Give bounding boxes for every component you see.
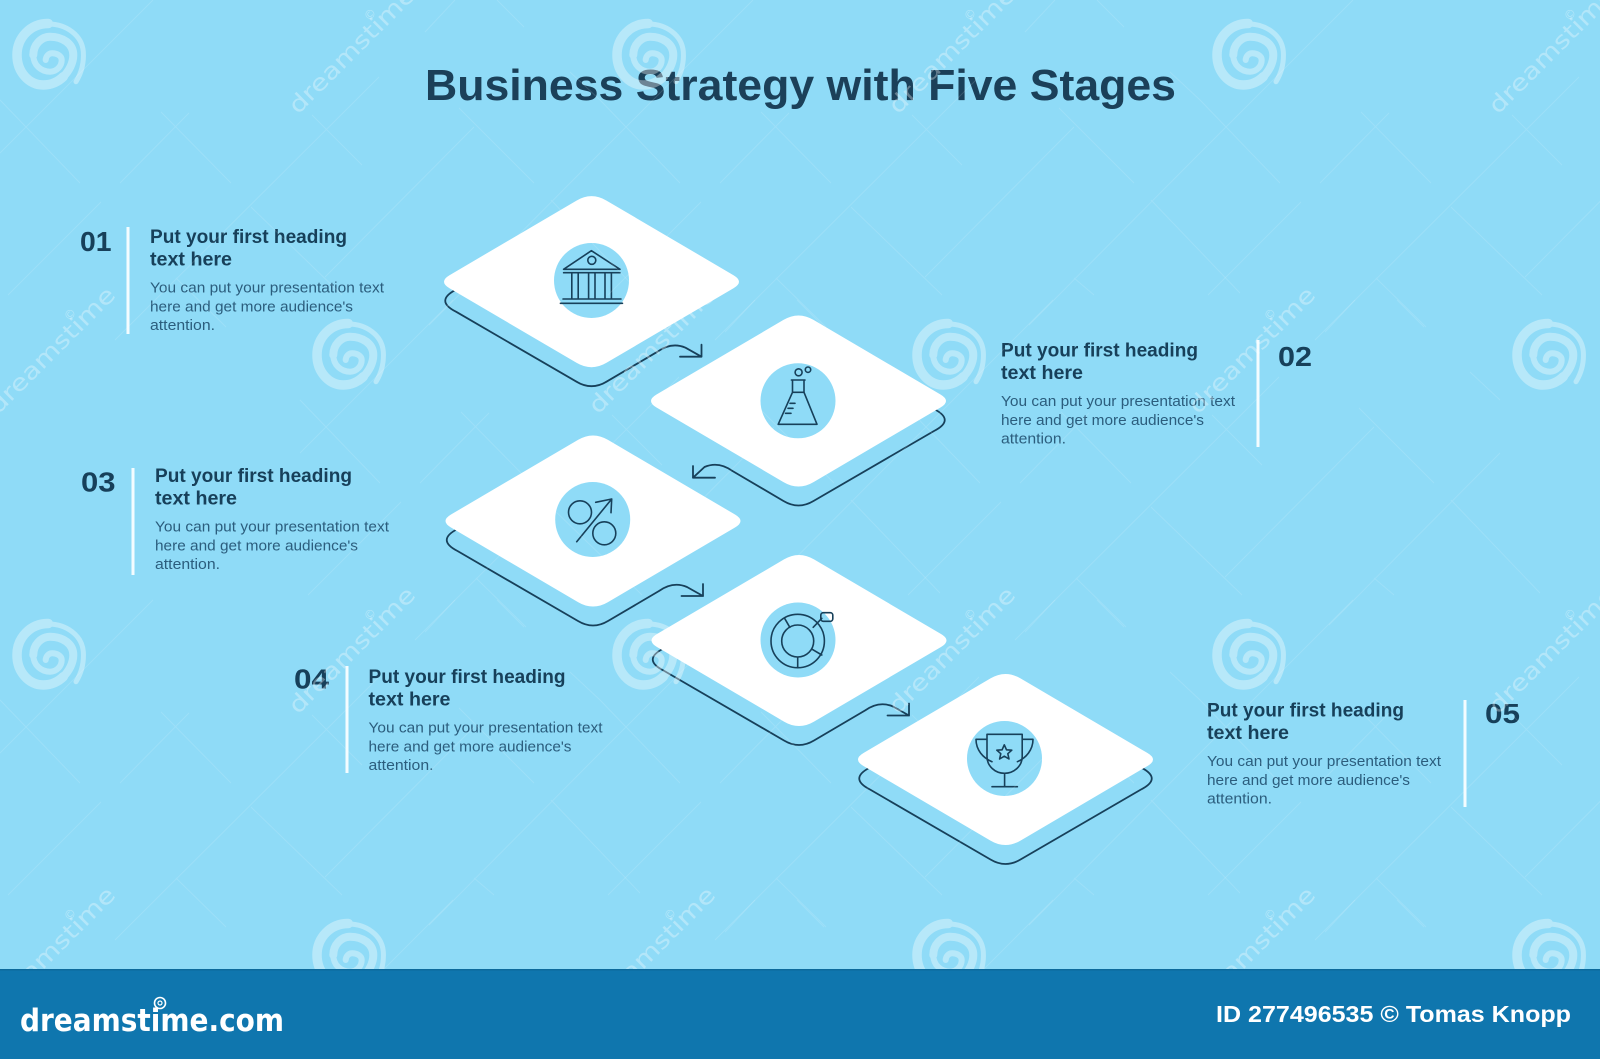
text block 03 [81, 465, 390, 575]
watermark text: © [361, 5, 379, 24]
watermark text: dreamstime [884, 582, 1021, 719]
heading 01: text here [150, 249, 232, 271]
number 01: 01 [80, 226, 112, 257]
icon: trophy [967, 721, 1042, 796]
heading 04: Put your first heading [368, 666, 566, 688]
number 02: 02 [1278, 341, 1312, 372]
body 05: here and get more audience's [1207, 772, 1410, 789]
body 04 [368, 720, 603, 774]
body 01: here and get more audience's [150, 299, 353, 316]
text block 04 [294, 664, 603, 774]
text block 02 [1001, 340, 1312, 448]
body 04: here and get more audience's [368, 739, 572, 756]
watermark text: © [961, 605, 979, 624]
body 05 [1207, 753, 1442, 808]
body 02: You can put your presentation text [1001, 393, 1236, 410]
heading 02: Put your first heading [1001, 340, 1198, 362]
watermark text: dreamstime [1184, 282, 1321, 419]
divider 02 [1256, 340, 1260, 447]
watermark text: dreamstime [584, 282, 721, 419]
stage 4 diamond [652, 555, 946, 745]
icon: percent arrow [555, 482, 630, 557]
heading 05: text here [1207, 722, 1289, 744]
white tile 5 [858, 674, 1153, 845]
heading 03 [155, 465, 352, 510]
footer credit: ID 277496535 © Tomas Knopp [1216, 1001, 1571, 1027]
divider 01 [126, 227, 130, 334]
watermark text: © [961, 5, 979, 24]
watermark text: © [661, 305, 679, 324]
divider 05 [1464, 700, 1466, 807]
watermark text: © [661, 905, 679, 924]
watermark text: dreamstime [1484, 582, 1600, 719]
watermark text: dreamstime [584, 882, 721, 1019]
watermark text: dreamstime [284, 0, 421, 119]
body 02: here and get more audience's [1001, 412, 1204, 429]
watermark text: © [1561, 5, 1579, 24]
watermark text: dreamstime [284, 582, 421, 719]
divider 04 [346, 666, 348, 773]
watermark text: dreamstime [1484, 0, 1600, 119]
lower outline of tile 5 [859, 768, 1152, 864]
watermark text: dreamstime [1184, 882, 1321, 1019]
text block 01 [80, 226, 385, 334]
stage 2 diamond [651, 315, 946, 506]
heading 03: text here [155, 488, 237, 510]
title: Business Strategy with Five Stages [425, 61, 1176, 110]
body 04: attention. [368, 757, 434, 774]
watermark text: dreamstime [884, 0, 1021, 119]
heading 01: Put your first heading [150, 226, 347, 248]
connector arrow 3 to 4 [447, 529, 703, 626]
icon: flask [760, 363, 836, 438]
footer logo: dreamstime.com [20, 1003, 284, 1039]
connector arrow 2 to 3 [693, 409, 945, 506]
number 04: 04 [294, 664, 329, 695]
white tile 2 [651, 315, 946, 487]
stage 3 diamond [446, 435, 740, 626]
white tile 3 [446, 435, 740, 607]
icon: bank [554, 243, 629, 318]
watermark text: © [361, 605, 379, 624]
stage 1 diamond [444, 196, 739, 386]
divider 03 [132, 468, 134, 575]
connector arrow 1 to 2 [445, 290, 702, 386]
connector arrow 4 to 5 [653, 648, 909, 745]
watermark text: © [1261, 905, 1279, 924]
text block 05 [1207, 698, 1520, 808]
heading 01 [150, 226, 347, 271]
heading 05: Put your first heading [1207, 700, 1404, 722]
white tile 4 [652, 555, 946, 726]
body 02 [1001, 393, 1236, 448]
body 03: attention. [155, 556, 220, 573]
body 02: attention. [1001, 430, 1066, 448]
body 03: You can put your presentation text [155, 518, 390, 536]
number 03: 03 [81, 466, 116, 498]
heading 02 [1001, 340, 1198, 384]
body 05: You can put your presentation text [1207, 753, 1442, 770]
body 03 [155, 518, 390, 573]
body 05: attention. [1207, 790, 1272, 808]
body 03: here and get more audience's [155, 538, 358, 554]
body 04: You can put your presentation text [368, 720, 603, 737]
heading 02: text here [1001, 362, 1083, 384]
watermark text: © [61, 305, 79, 324]
heading 05 [1207, 700, 1404, 744]
watermark text: © [1261, 305, 1279, 324]
stage 5 diamond [858, 674, 1153, 864]
heading 04 [368, 666, 566, 711]
body 01: attention. [150, 317, 215, 334]
white tile 1 [444, 196, 739, 367]
icon: donut chart [760, 602, 836, 678]
watermark text: © [61, 905, 79, 924]
body 01: You can put your presentation text [150, 280, 385, 297]
heading 03: Put your first heading [155, 465, 352, 487]
number 05: 05 [1485, 698, 1520, 729]
footer bar [0, 969, 1600, 1059]
heading 04: text here [368, 689, 451, 711]
watermark text: © [1561, 605, 1579, 624]
body 01 [150, 280, 385, 334]
